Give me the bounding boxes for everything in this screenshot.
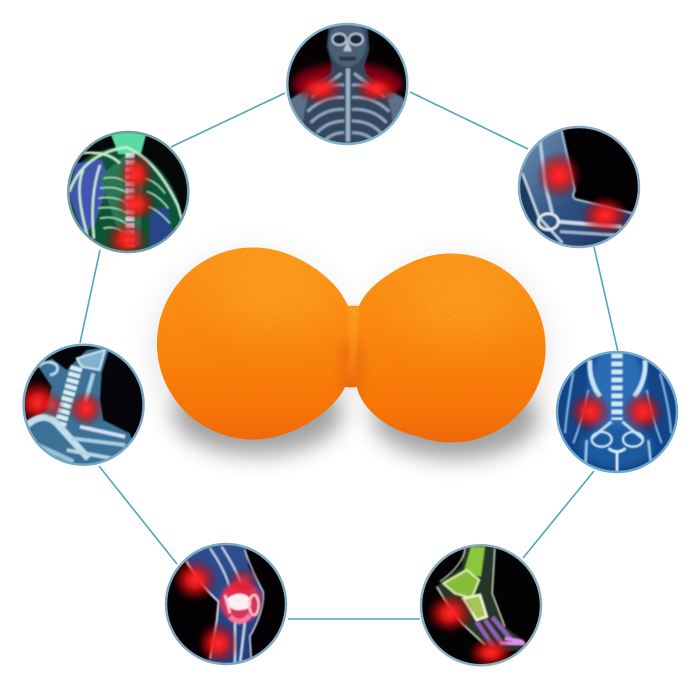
pain glow — [118, 153, 154, 195]
icon ring — [421, 545, 541, 665]
icon ring — [166, 544, 286, 664]
icon: foot and heel pain — [422, 546, 540, 664]
ball shadow — [152, 252, 550, 458]
pain glow — [536, 151, 582, 199]
back — [70, 143, 181, 251]
icon ring — [24, 345, 144, 465]
ball shading — [215, 250, 518, 406]
pain glow — [297, 74, 344, 104]
waist seam — [346, 306, 358, 387]
torso — [290, 26, 404, 143]
pebbled texture — [157, 248, 546, 442]
lower leg and foot — [437, 547, 525, 652]
icon: spine and back pain — [70, 133, 188, 251]
neck and shoulders — [29, 348, 132, 464]
knee joint — [220, 581, 261, 622]
double massage ball — [152, 248, 550, 458]
icon: elbow pain — [520, 128, 638, 246]
icon ring — [287, 24, 407, 144]
pain glow — [569, 391, 611, 432]
pain glow — [426, 593, 474, 634]
pain glow behind — [24, 380, 52, 420]
connector lines: heptagon linking the pain points — [80, 92, 618, 619]
pain glow front — [68, 391, 104, 427]
icon: knee pain — [167, 545, 285, 663]
leg — [183, 543, 263, 670]
icon: cervical spine pain — [24, 346, 142, 464]
icon: neck and shoulders pain — [288, 25, 406, 143]
icon ring — [68, 132, 188, 252]
pain glow — [172, 558, 218, 602]
icon ring — [557, 352, 677, 472]
ball body — [157, 248, 546, 442]
shoulder glow — [292, 63, 402, 105]
icon: lower back and hips pain — [558, 353, 676, 471]
lower left sliver — [520, 172, 558, 242]
arm — [522, 131, 632, 246]
icon ring — [519, 127, 639, 247]
